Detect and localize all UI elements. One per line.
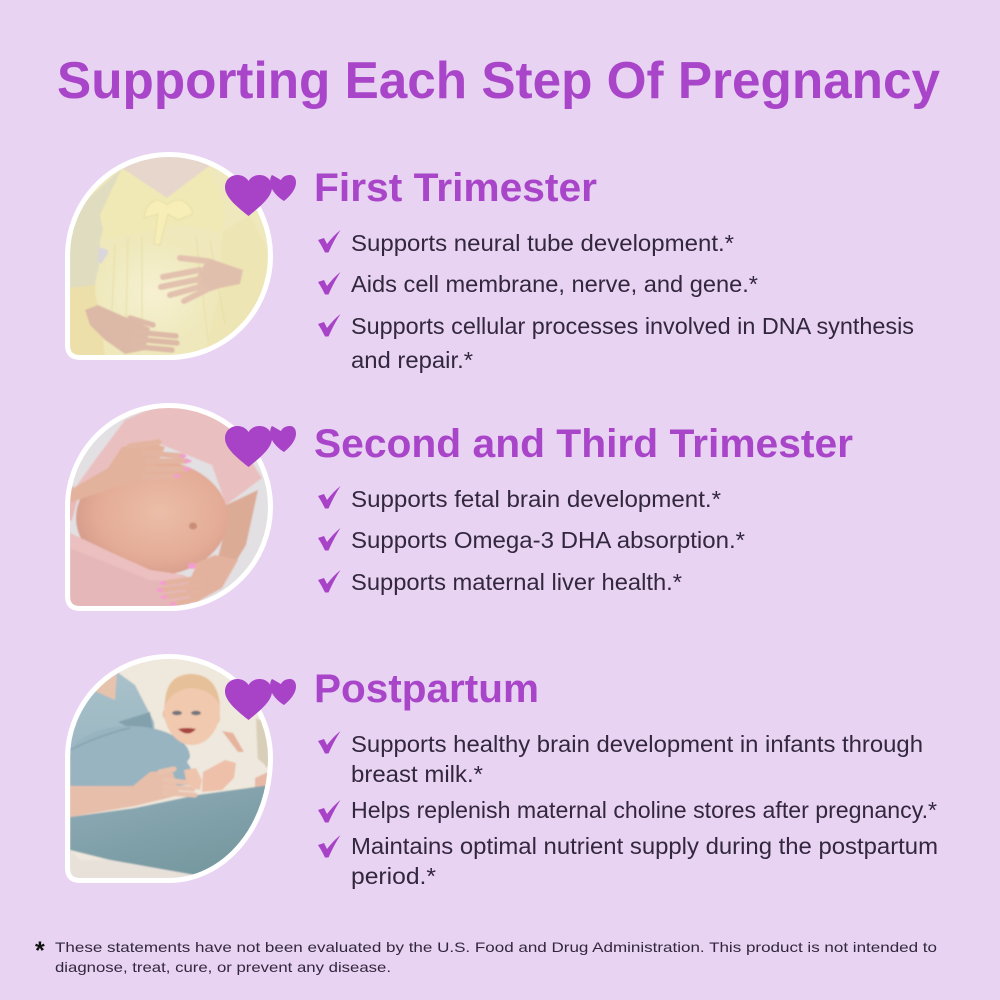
item	[318, 313, 914, 373]
item: Supports cellular processes involved in DNA synthesis	[351, 313, 914, 339]
photo: mother with smiling baby	[60, 650, 280, 890]
asterisk: *	[35, 937, 45, 965]
photo: bare pregnant belly	[60, 400, 280, 615]
list	[318, 230, 914, 373]
icon: hearts	[225, 426, 296, 467]
item: and repair.*	[351, 347, 473, 373]
item: Maintains optimal nutrient supply during the postpartum	[351, 833, 938, 859]
photo: pregnant woman in yellow dress	[60, 150, 280, 365]
icon: hearts	[225, 679, 296, 720]
footnote: These statements have not been evaluated by the U.S. Food and Drug Administration. This product is not intended to	[55, 939, 937, 955]
item: Supports maternal liver health.*	[351, 569, 682, 595]
list	[318, 486, 745, 595]
item: Supports Omega-3 DHA absorption.*	[351, 527, 745, 553]
list	[318, 731, 938, 889]
title: Supporting Each Step Of Pregnancy	[57, 52, 940, 110]
item: Supports healthy brain development in infants through	[351, 731, 923, 757]
heading: First Trimester	[314, 166, 597, 210]
heading: Second and Third Trimester	[314, 422, 853, 466]
item: period.*	[351, 863, 436, 889]
item	[318, 833, 938, 889]
panel: second and third trimester	[60, 400, 853, 615]
item: Supports fetal brain development.*	[351, 486, 721, 512]
heading: Postpartum	[314, 667, 539, 711]
item: Supports neural tube development.*	[351, 230, 734, 256]
footnote: diagnose, treat, cure, or prevent any disease.	[55, 959, 391, 975]
panel: first trimester	[60, 150, 914, 373]
footnote	[35, 937, 937, 975]
item: breast milk.*	[351, 761, 483, 787]
item: Aids cell membrane, nerve, and gene.*	[351, 271, 758, 297]
icon: hearts	[225, 175, 296, 216]
item: Helps replenish maternal choline stores after pregnancy.*	[351, 797, 937, 823]
item	[318, 731, 923, 787]
panel: postpartum	[60, 650, 938, 890]
